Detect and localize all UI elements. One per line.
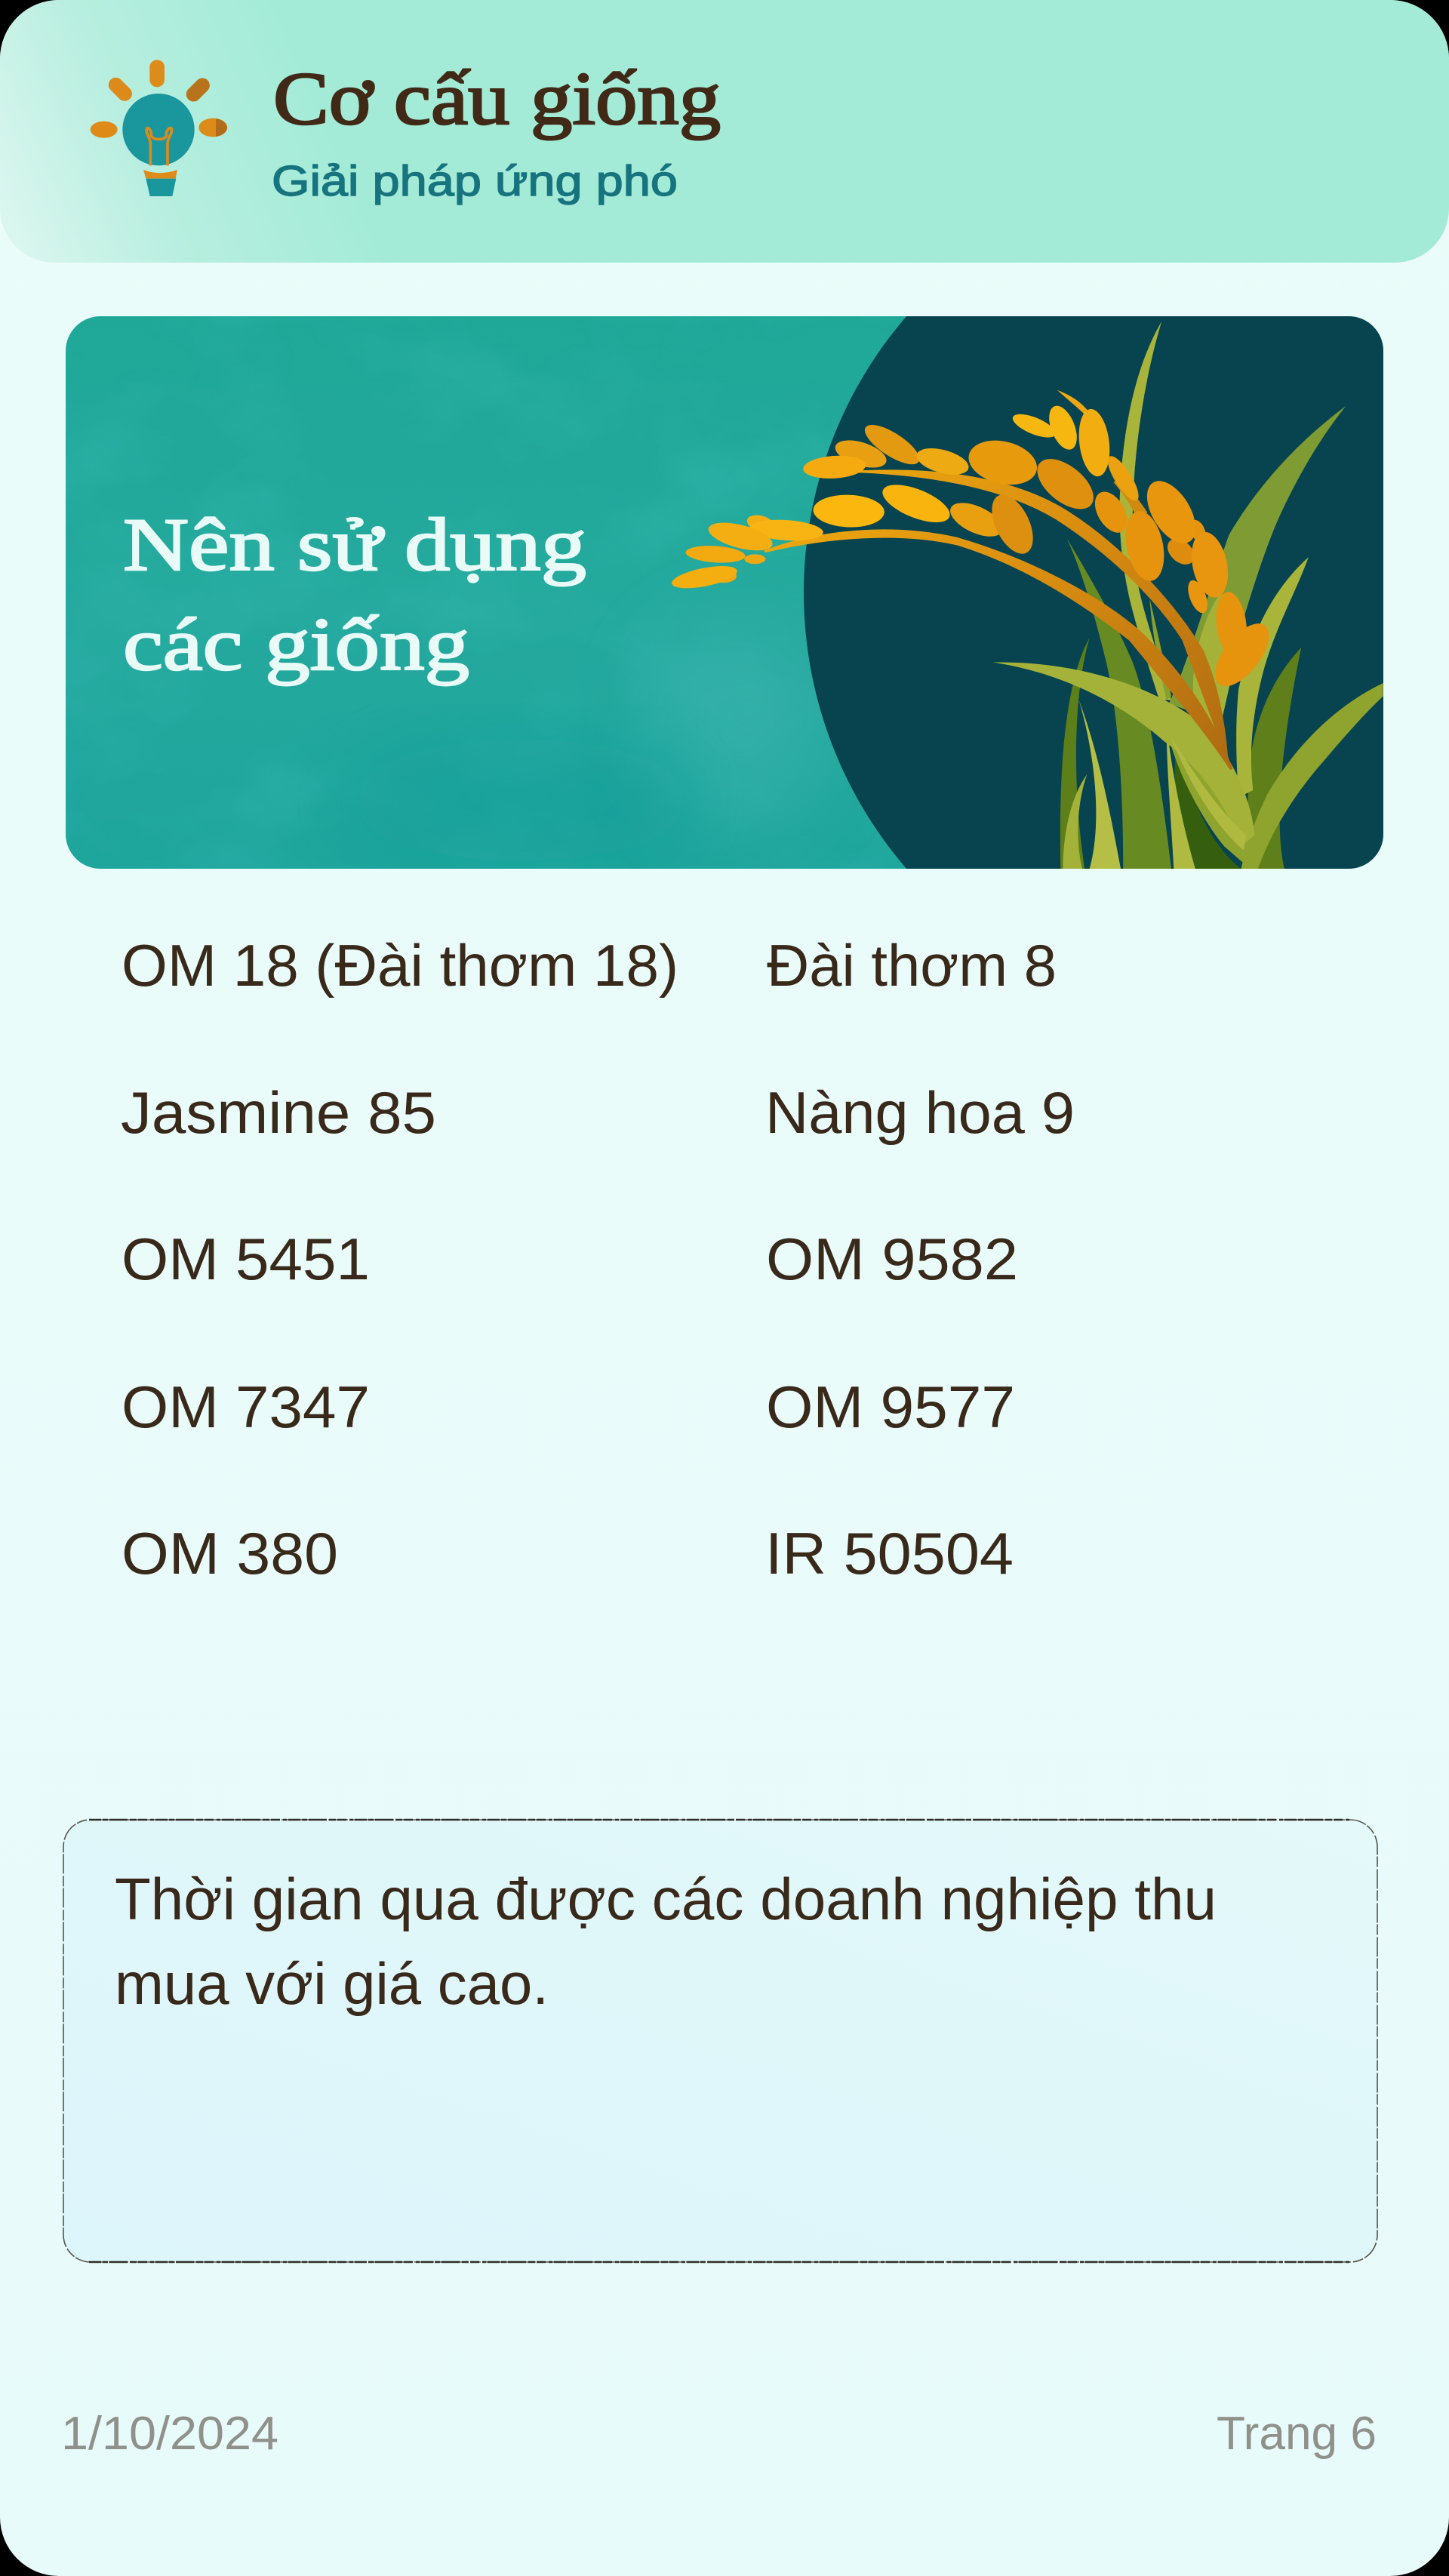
callout: note box	[63, 1820, 1377, 2262]
list item: OM 7347	[122, 1374, 370, 1440]
panel: header	[0, 0, 1449, 263]
illustration: rice plant	[669, 322, 1383, 869]
footer: date: 1/10/2024	[61, 2408, 278, 2460]
list item: OM 9582	[766, 1226, 1018, 1292]
grains: lower cluster	[1215, 592, 1269, 687]
list item: OM 380	[122, 1520, 338, 1587]
list item: OM 5451	[122, 1226, 370, 1292]
list: recommended varieties	[121, 932, 1075, 1587]
footer: page number: Trang 6	[1217, 2408, 1377, 2460]
list item: Đài thơm 8	[767, 932, 1057, 999]
list item: Nàng hoa 9	[765, 1079, 1075, 1146]
leaves	[993, 322, 1383, 869]
stems	[764, 390, 1232, 769]
panel: banner	[66, 316, 1383, 869]
icon: light bulb	[91, 60, 227, 196]
grains: lower panicle	[672, 485, 1033, 589]
heading: banner	[123, 503, 586, 686]
callout text: Thời gian qua được các doanh nghiệp thu	[115, 1866, 1217, 1932]
callout text: mua với giá cao.	[115, 1950, 549, 2017]
heading: banner: Nên sử dụng	[123, 503, 586, 586]
dark circle backdrop	[804, 316, 1383, 869]
list item: OM 9577	[766, 1374, 1015, 1440]
heading: banner: các giống	[123, 602, 469, 686]
list item: Jasmine 85	[121, 1079, 436, 1146]
title: Cơ cấu giống	[273, 57, 721, 140]
grains: upper panicle	[802, 404, 1233, 614]
callout text	[115, 1866, 1217, 2017]
subtitle: Giải pháp ứng phó	[272, 157, 678, 205]
list item: IR 50504	[765, 1520, 1014, 1587]
list item: OM 18 (Đài thơm 18)	[122, 932, 678, 999]
